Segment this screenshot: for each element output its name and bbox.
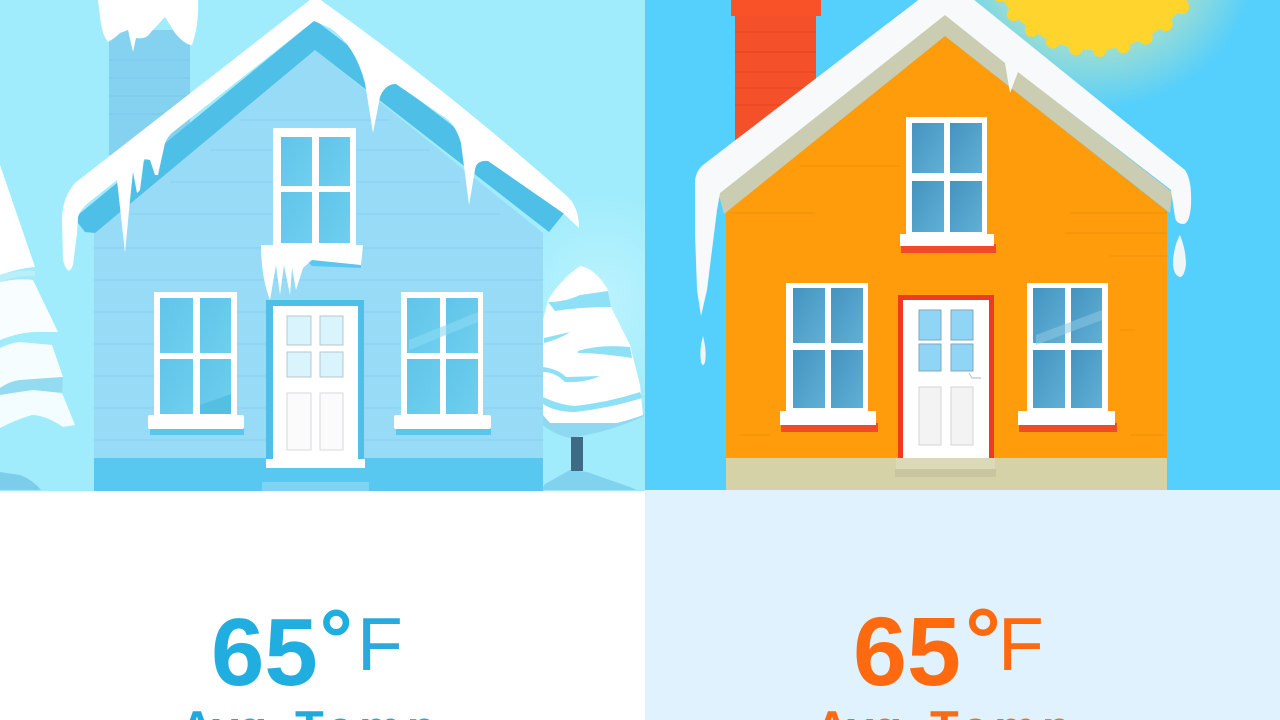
frost glow — [500, 190, 700, 410]
snowy tree left — [0, 165, 75, 490]
temperature cold: 65 — [211, 599, 318, 706]
sun — [985, 0, 1205, 50]
warm ground — [645, 490, 1280, 720]
temperature warm: F — [998, 602, 1044, 686]
chimney snow cap — [98, 0, 198, 52]
melting drops — [700, 235, 1186, 365]
panel: warm side — [645, 0, 1280, 720]
warm door — [898, 295, 994, 459]
lower left window cold — [148, 292, 244, 435]
cold base — [94, 458, 543, 491]
temperature cold: F — [357, 602, 403, 686]
panel: cold side — [0, 0, 700, 720]
warm wall — [726, 36, 1167, 459]
lower left window warm — [780, 283, 878, 432]
warm chimney — [731, 0, 821, 145]
upper window cold — [273, 128, 356, 246]
lower right window cold — [394, 292, 491, 435]
snow on roof with icicles — [62, 0, 579, 270]
upper sill with icicles — [261, 245, 363, 300]
lower right window warm — [1018, 283, 1117, 432]
warm step — [895, 458, 996, 477]
temperature cold: ° — [319, 594, 353, 690]
upper window warm — [900, 117, 996, 253]
temperature warm: 65 — [853, 597, 961, 706]
cold step — [262, 482, 369, 491]
warm roof underside — [718, 14, 1172, 214]
cold sky — [0, 0, 645, 491]
warm roof snow — [695, 0, 1191, 316]
snowy tree right — [541, 266, 644, 490]
sun glow — [930, 0, 1260, 110]
cold roof underside — [78, 20, 565, 233]
temperature warm: ° — [965, 591, 1001, 691]
cold chimney — [109, 30, 190, 155]
cold ground — [0, 491, 645, 720]
warm foundation — [726, 458, 1167, 490]
temperature warm — [853, 591, 1044, 706]
warm sky — [645, 0, 1280, 490]
temperature cold — [211, 594, 403, 706]
cold wall — [94, 50, 543, 460]
cold door — [266, 300, 365, 468]
